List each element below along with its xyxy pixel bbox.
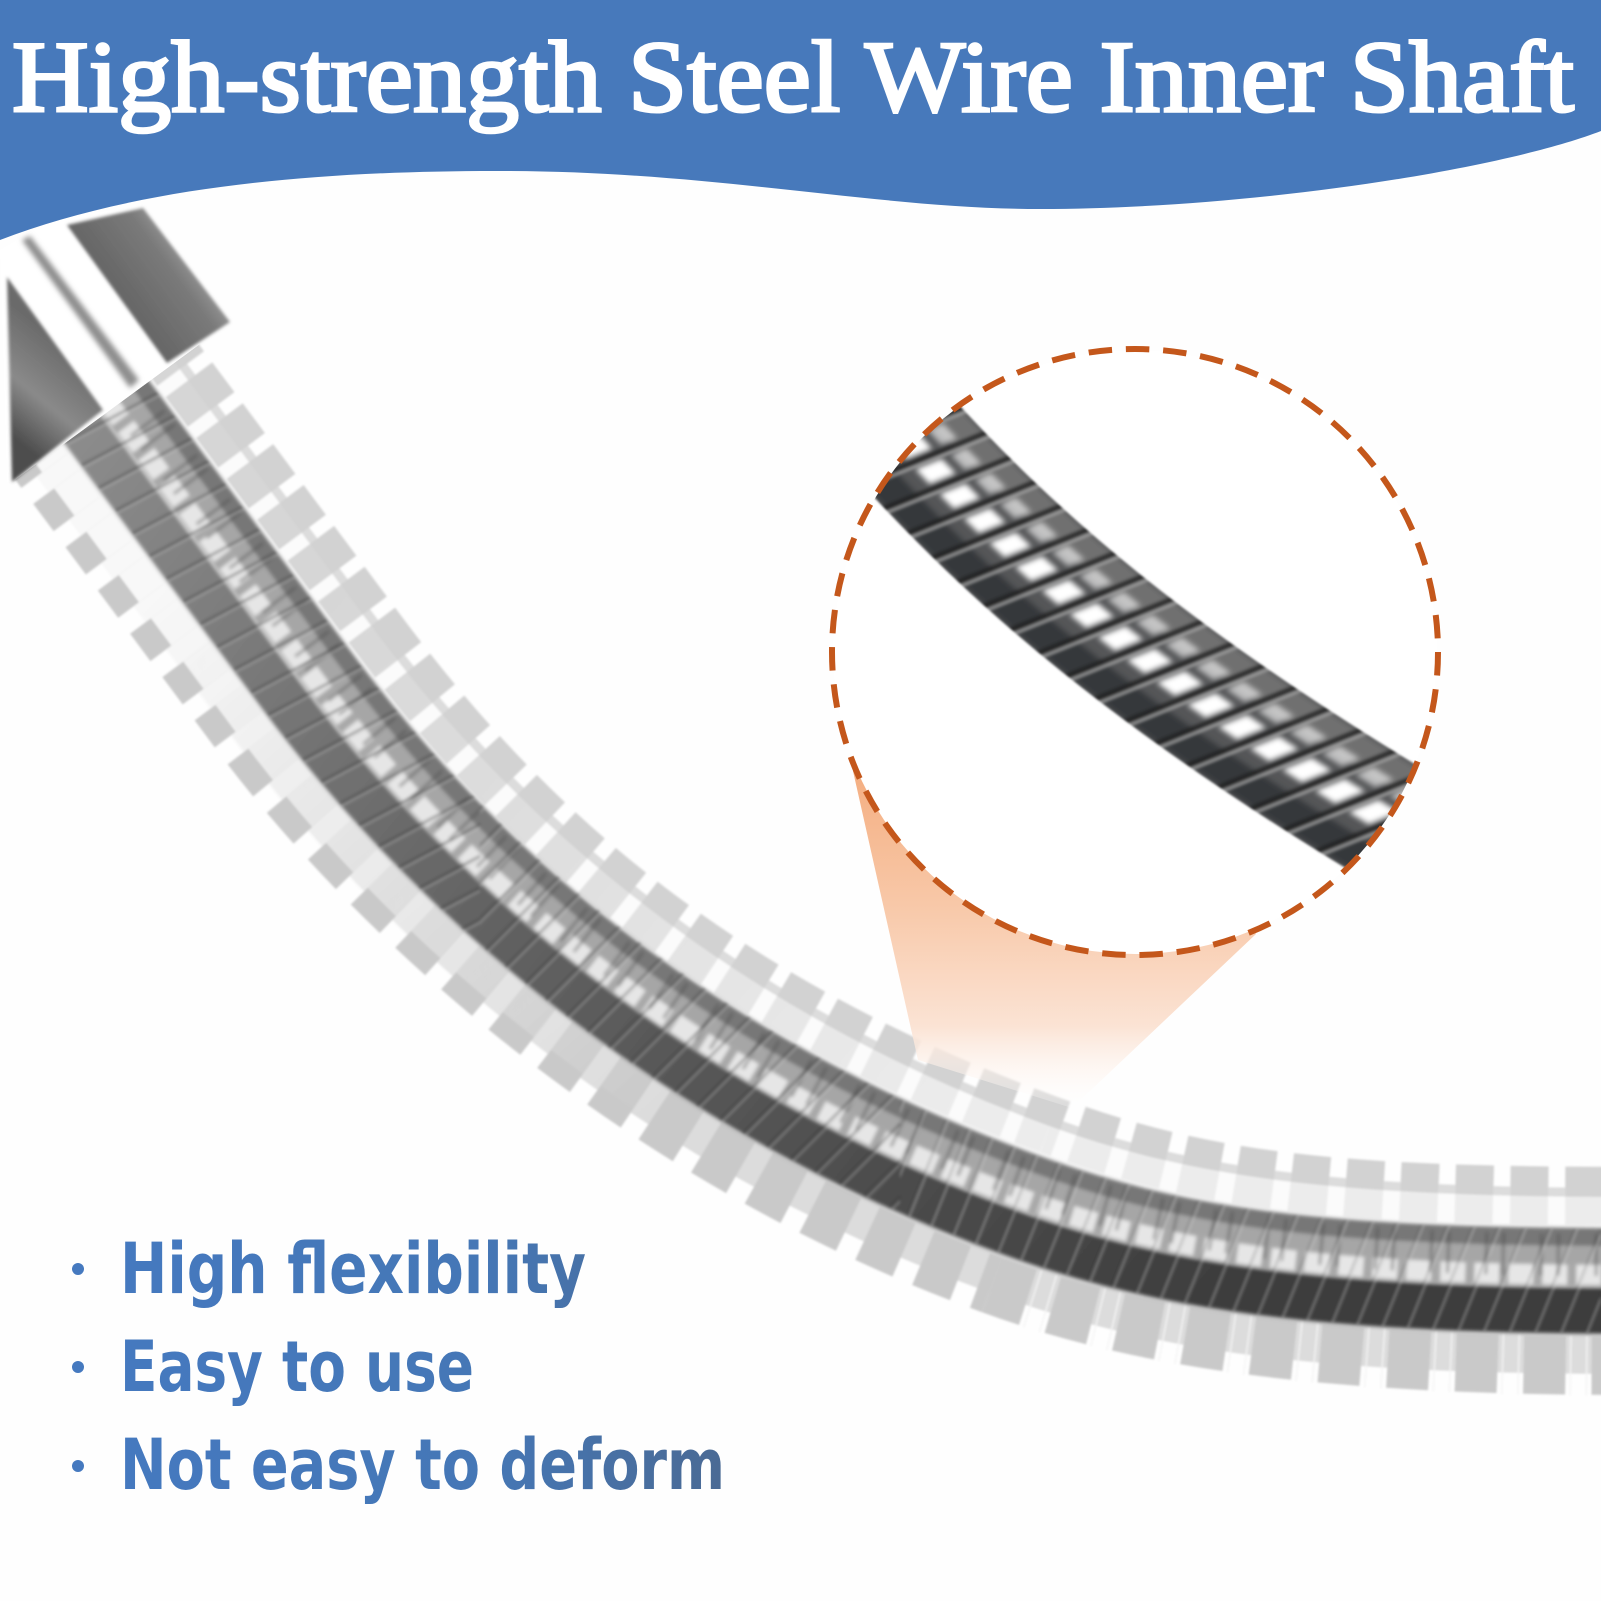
circle interior: [833, 350, 1437, 954]
corrugated hose: [15, 344, 1601, 1396]
magnified steel tube: [874, 406, 1414, 868]
callout cone: [853, 700, 1256, 1108]
blue wave banner: [0, 0, 1601, 240]
hose collar between teeth: [60, 349, 1601, 1281]
inner steel tube: [62, 380, 1601, 1337]
bullet: high flexibility: High flexibility: [120, 1228, 586, 1310]
chrome sleeve: [0, 208, 230, 482]
bullet: not easy to deform: Not easy to deform: [120, 1424, 725, 1506]
title: High-strength Steel Wire Inner Shaft: [12, 21, 1574, 134]
magnifier circle: [829, 346, 1441, 958]
lower teeth: [0, 400, 1601, 1366]
bullet: easy to use: Easy to use: [120, 1326, 474, 1408]
feature list: [72, 1228, 725, 1506]
upper teeth: [128, 298, 1601, 1196]
dashed orange ring: [832, 349, 1438, 955]
